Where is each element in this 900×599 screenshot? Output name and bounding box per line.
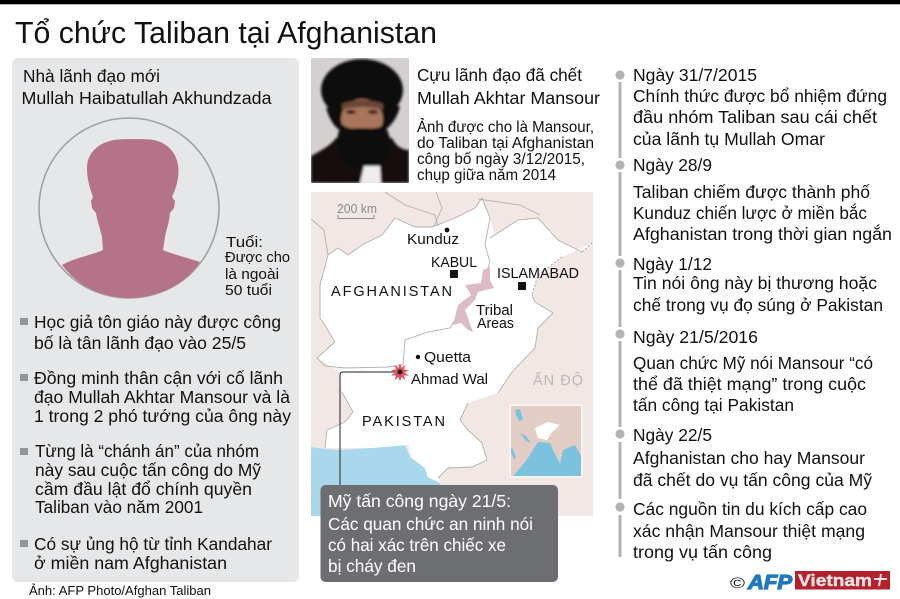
- label: Afghanistan: AFGHANISTAN: [331, 284, 452, 300]
- label: Tribal Areas: Areas: [477, 316, 514, 332]
- event: 31/7/2015: đầu nhóm Taliban sau cái chết: [633, 107, 877, 127]
- icon: silhouette portrait: [39, 118, 219, 298]
- age note: [225, 235, 290, 299]
- event: 28/9: [633, 155, 892, 244]
- age note: Được cho: [225, 250, 290, 266]
- bullet: announced as new leader: Học giả tôn giáo này được công: [34, 312, 281, 332]
- event: 1/12: Ngày 1/12: [633, 254, 712, 274]
- inset locator map: [510, 404, 582, 478]
- bullet: chief justice: [20, 441, 261, 517]
- event: 28/9: Afghanistan trong thời gian ngắn: [633, 223, 892, 244]
- bullet: Kandahar support: Có sự ủng hộ từ tỉnh Kandahar: [34, 534, 272, 554]
- heading: new leader: Mullah Haibatullah Akhundzada: [22, 88, 272, 108]
- map: Afghanistan and Pakistan: [311, 192, 593, 516]
- event: 1/12: Tin nói ông này bị thương hoặc: [633, 273, 877, 293]
- callout: US strike: bị cháy đen: [328, 556, 416, 576]
- event: guerrilla sources: trong vụ tấn công: [633, 542, 772, 562]
- label: India: ẤN ĐỘ: [533, 372, 583, 389]
- callout: US strike: có hai xác trên chiếc xe: [328, 535, 506, 555]
- former leader text: Cựu lãnh đạo đã chết: [417, 65, 582, 85]
- event: 21/5/2016: Ngày 21/5/2016: [633, 327, 758, 347]
- panel: new leader: [12, 58, 299, 582]
- former leader text: Mullah Akhtar Mansour: [417, 88, 600, 108]
- icon: strike marker: [391, 363, 409, 382]
- event: 21/5/2016: tấn công tại Pakistan: [633, 395, 794, 415]
- event: 1/12: chế trong vụ đọ súng ở Pakistan: [633, 295, 883, 315]
- timeline: [615, 65, 892, 562]
- scale bar: 200 km: [337, 201, 377, 216]
- former leader text: do Taliban tại Afghanistan: [417, 135, 594, 152]
- label: Ahmad Wal: Ahmad Wal: [411, 372, 488, 388]
- event: 22/5: [633, 425, 872, 490]
- event: 31/7/2015: Ngày 31/7/2015: [633, 65, 757, 85]
- callout: US strike: Các quan chức an ninh nói: [328, 514, 533, 534]
- timeline rail: [615, 70, 625, 557]
- bullet: Kandahar support: [20, 534, 272, 573]
- label: Islamabad: [497, 266, 579, 290]
- event: 31/7/2015: [633, 65, 887, 149]
- bullet: close ally: [20, 368, 291, 426]
- age note: là ngoài: [225, 267, 279, 283]
- bullet: chief justice: Từng là “chánh án” của nhóm: [35, 441, 259, 461]
- label: Pakistan: PAKISTAN: [362, 414, 445, 430]
- event: guerrilla sources: [633, 499, 867, 562]
- bullet: announced as new leader: bố là tân lãnh đạo vào 25/5: [34, 333, 246, 353]
- bullet: chief justice: cầm đầu lật đổ chính quyền: [35, 479, 252, 499]
- event: 28/9: Kunduz chiến lược ở miền bắc: [633, 202, 867, 223]
- bullet: chief justice: Taliban vào năm 2001: [35, 497, 203, 517]
- label: Kabul: KABUL: [431, 255, 477, 271]
- label: Quetta: Quetta: [424, 350, 472, 366]
- heading: new leader: [22, 66, 272, 108]
- event: 21/5/2016: Quan chức Mỹ nói Mansour “có: [633, 353, 873, 373]
- heading: new leader: Nhà lãnh đạo mới: [23, 66, 160, 86]
- bullet: Kandahar support: ở miền nam Afghanistan: [34, 553, 227, 573]
- logo: AFP and Vietnam+: Vietnam: [798, 571, 872, 590]
- bullet: close ally: đạo Mullah Akhtar Mansour và là: [34, 387, 290, 407]
- label: Kunduz: Kunduz: [407, 232, 459, 248]
- photo: Mullah Akhtar Mansour: [311, 58, 409, 183]
- title: Tổ chức Taliban tại Afghanistan: [15, 16, 437, 50]
- former leader text: Ảnh được cho là Mansour,: [417, 119, 594, 136]
- event: 28/9: Taliban chiếm được thành phố: [633, 182, 870, 202]
- event: 21/5/2016: [633, 327, 873, 415]
- event: 22/5: Afghanistan cho hay Mansour: [633, 448, 865, 468]
- tribal areas region: [453, 267, 494, 332]
- label: Tribal Areas: [476, 303, 514, 332]
- bullet: chief justice: này sau cuộc tấn công do Mỹ: [35, 460, 261, 480]
- event: 22/5: đã chết do vụ tấn công của Mỹ: [633, 470, 872, 490]
- logo: AFP and Vietnam+: ©: [730, 575, 745, 592]
- bullet: close ally: Đồng minh thân cận với cố lãnh: [34, 368, 283, 388]
- label: Tribal Areas: Tribal: [476, 303, 513, 319]
- callout: US strike: Mỹ tấn công ngày 21/5:: [328, 491, 511, 511]
- label: Kabul: [431, 255, 477, 278]
- former leader text: chụp giữa năm 2014: [417, 167, 556, 184]
- event: 1/12: [633, 254, 883, 315]
- event: 31/7/2015: của lãnh tụ Mullah Omar: [633, 129, 825, 149]
- event: guerrilla sources: xác nhận Mansour thiệt mạng: [633, 521, 865, 541]
- label: Islamabad: ISLAMABAD: [497, 266, 579, 282]
- bullet: announced as new leader: [20, 312, 281, 353]
- former leader text: công bố ngày 3/12/2015,: [417, 151, 585, 168]
- event: 22/5: Ngày 22/5: [633, 425, 712, 445]
- callout: US strike: [320, 485, 558, 582]
- event: 21/5/2016: thể đã thiệt mạng” trong cuộc: [633, 374, 866, 394]
- age note: 50 tuổi: [225, 283, 272, 299]
- photo credit: Ảnh: AFP Photo/Afghan Taliban: [29, 583, 211, 598]
- event: 31/7/2015: Chính thức được bổ nhiệm đứng: [633, 86, 887, 106]
- former leader text: [417, 65, 600, 184]
- logo: AFP and Vietnam+: [730, 571, 890, 594]
- bullet: close ally: 1 trong 2 phó tướng của ông này: [34, 406, 291, 426]
- event: guerrilla sources: Các nguồn tin du kích cấp cao: [633, 499, 867, 519]
- event: 28/9: Ngày 28/9: [633, 155, 712, 175]
- leader line to callout: [340, 372, 396, 486]
- logo: AFP and Vietnam+: AFP: [747, 572, 793, 594]
- age note: Tuổi:: [226, 235, 263, 251]
